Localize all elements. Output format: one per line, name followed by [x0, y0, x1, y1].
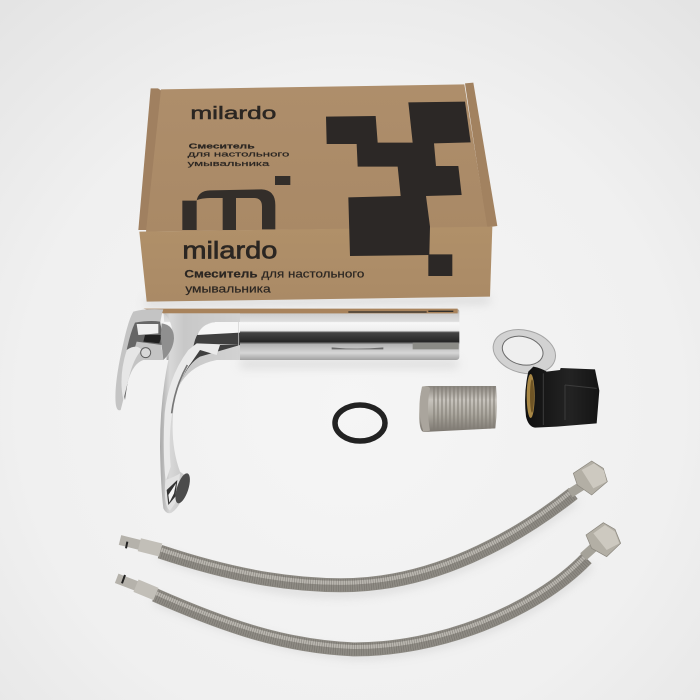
base aerator end — [172, 472, 193, 505]
box top face — [146, 84, 487, 232]
hose upper tip — [120, 540, 140, 545]
front caption line 2: умывальника — [185, 283, 272, 295]
front caption line 1: Смеситель для настольного — [184, 268, 364, 280]
lid caption line 1: Смеситель — [189, 142, 255, 151]
soft shadows — [145, 300, 590, 655]
black nut — [525, 367, 599, 428]
hose upper cap nut — [573, 461, 607, 495]
set screw — [413, 343, 459, 349]
box front face — [139, 227, 492, 302]
hose lower — [117, 523, 621, 649]
brass insert — [527, 374, 535, 418]
hose lower neck — [583, 542, 600, 557]
spout elbow highlight — [175, 322, 240, 390]
sleeve body — [419, 386, 497, 432]
hose upper neck — [570, 481, 590, 493]
black pixel pattern — [326, 102, 471, 256]
aerator slot — [332, 347, 383, 349]
hose upper braid — [160, 493, 573, 585]
nut body — [525, 367, 599, 428]
hose upper — [120, 461, 607, 585]
washer hole — [499, 332, 546, 369]
sleeve lip — [420, 386, 430, 432]
chrome washer — [488, 323, 560, 380]
box left flap — [138, 88, 161, 230]
threaded sleeve — [419, 386, 497, 432]
lid caption — [188, 142, 289, 168]
pattern small square — [428, 254, 452, 276]
lever handle — [115, 309, 163, 410]
cardboard box — [138, 83, 497, 302]
hose lower tip — [117, 578, 137, 586]
cartridge collar — [161, 323, 174, 360]
sleeve threads — [434, 386, 494, 431]
faucet — [115, 309, 459, 513]
washer outer — [488, 323, 560, 380]
base underside — [165, 473, 180, 511]
hose lower cap nut — [586, 523, 621, 557]
lid caption line 2: для настольного — [188, 150, 289, 159]
lid logo: milardo — [190, 103, 276, 123]
hose lower braid — [155, 558, 587, 649]
spout tube — [163, 309, 459, 360]
faucet body — [160, 313, 240, 513]
box right flap — [465, 83, 497, 227]
lid caption line 3: умывальника — [188, 159, 271, 168]
nut facet — [543, 373, 597, 425]
rubber ring — [335, 405, 385, 441]
large m emblem — [182, 176, 290, 230]
front logo: milardo — [182, 237, 277, 264]
box reflection on spout — [143, 309, 458, 313]
